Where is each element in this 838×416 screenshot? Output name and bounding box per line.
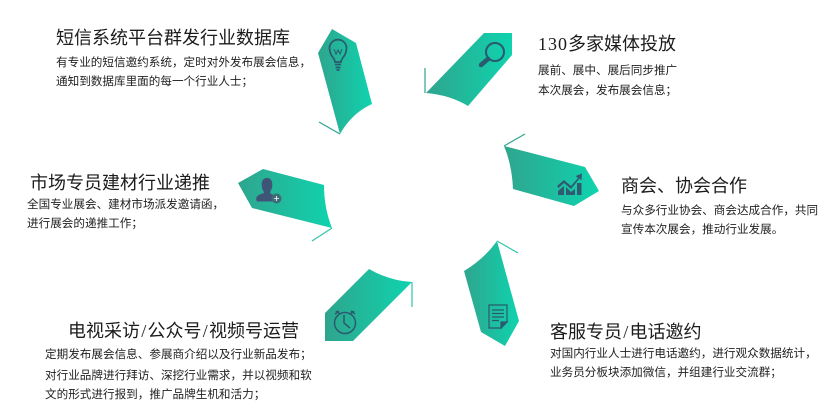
icon: magnifier — [481, 43, 504, 65]
description: brand visits: 对行业品牌进行拜访、深挖行业需求，并以视频和软 — [45, 368, 312, 382]
description: TV and social media: 定期发布展会信息、参展商介绍以及行业新品发布； — [45, 348, 312, 361]
heading: TV and social media: 电视采访/公众号/视频号运营 — [68, 321, 299, 341]
text block: customer service — [550, 322, 817, 379]
icon: clock — [334, 311, 356, 334]
heading: customer service: 客服专员/电话邀约 — [550, 322, 702, 342]
description: market specialists: 进行展会的递推工作； — [27, 217, 143, 230]
description: media: 展前、展中、展后同步推广 — [538, 64, 677, 77]
description: SMS platform: 通知到数据库里面的每一个行业人士； — [56, 74, 253, 88]
heading: media: 130多家媒体投放 — [538, 34, 676, 54]
petal: light bulb — [318, 29, 372, 134]
icon: person — [256, 178, 282, 204]
description: associations: 与众多行业协会、商会达成合作，共同 — [621, 204, 818, 217]
description: customer service — [550, 347, 817, 379]
text block: market specialists — [27, 173, 224, 230]
description: brand visits: 文的形式进行报到，推广品牌生机和活力； — [45, 388, 265, 400]
petal: document — [464, 241, 519, 346]
text block: TV and social media — [45, 321, 312, 400]
petal: growth chart — [504, 134, 599, 206]
text block: SMS platform — [56, 28, 311, 88]
description: customer service: 业务员分板块添加微信，并组建行业交流群； — [550, 366, 782, 379]
icon: document — [489, 305, 507, 328]
petal: person — [238, 169, 332, 241]
icon: light bulb — [330, 40, 346, 70]
description: market specialists — [27, 198, 224, 230]
text block: media — [538, 34, 677, 96]
description: associations — [621, 204, 818, 236]
description: media — [538, 64, 677, 96]
petal: clock — [325, 269, 412, 341]
text block: associations — [621, 176, 818, 236]
description: SMS platform: 有专业的短信邀约系统，定时对外发布展会信息， — [56, 56, 311, 68]
description: customer service: 对国内行业人士进行电话邀约，进行观众数据统计， — [550, 347, 817, 360]
description: SMS platform — [56, 56, 311, 88]
description: brand visits — [45, 368, 312, 400]
petal: magnifier — [425, 33, 512, 106]
heading: associations: 商会、协会合作 — [621, 176, 747, 196]
heading: SMS platform: 短信系统平台群发行业数据库 — [56, 28, 290, 48]
heading: market specialists: 市场专员建材行业递推 — [30, 173, 210, 193]
icon: growth chart — [557, 174, 582, 195]
description: media: 本次展会，发布展会信息； — [538, 84, 677, 96]
description: market specialists: 全国专业展会、建材市场派发邀请函， — [27, 198, 224, 211]
description: associations: 宣传本次展会，推动行业发展。 — [621, 222, 783, 236]
